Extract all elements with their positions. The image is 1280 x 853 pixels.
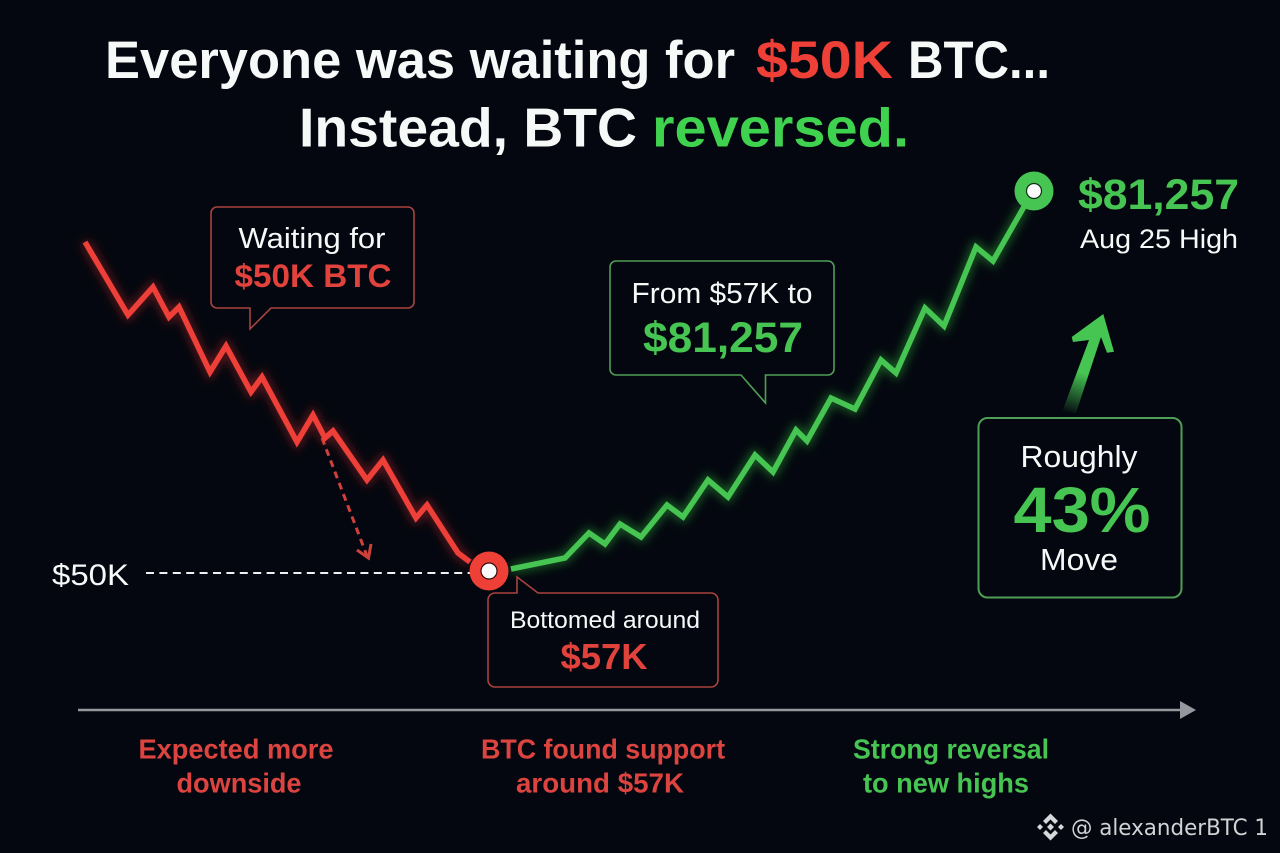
- title: reversed.: [652, 98, 909, 158]
- high price label: Aug 25 High: [1080, 224, 1238, 254]
- callout: roughly 43% move: 43%: [1014, 474, 1150, 546]
- title: Instead, BTC: [299, 98, 637, 158]
- timeline label: BTC found support: [481, 734, 725, 798]
- green rising price line: [511, 205, 1025, 569]
- red falling price line: [85, 242, 470, 562]
- $50K level label: $50K: [52, 559, 129, 592]
- timeline label: expected more downside: Expected more: [138, 734, 334, 764]
- dashed arrow: expected downside: [322, 438, 371, 558]
- high price label: $81,257: [1078, 171, 1239, 219]
- timeline label: BTC found support: BTC found support: [481, 734, 725, 764]
- title: [105, 31, 1050, 158]
- callout: waiting for $50K BTC: Waiting for: [238, 223, 386, 255]
- timeline axis arrow: [78, 701, 1196, 719]
- timeline label: strong reversal: to new highs: [863, 768, 1029, 798]
- title: Everyone was waiting for: [105, 31, 735, 90]
- callout: bottomed around $57K: $57K: [560, 636, 648, 677]
- timeline label: expected more downside: downside: [176, 768, 302, 798]
- timeline label: strong reversal: Strong reversal: [853, 734, 1049, 764]
- marker: high point: [1014, 172, 1054, 210]
- marker: bottom point: [470, 552, 508, 590]
- timeline label: strong reversal: [853, 734, 1049, 798]
- watermark: @ alexanderBTC 1: [1071, 816, 1268, 841]
- callout: bottomed around $57K: Bottomed around: [510, 607, 700, 634]
- callout: roughly 43% move: Move: [1040, 542, 1118, 577]
- arrow: upward move: [1062, 314, 1114, 413]
- callout: from $57K to $81,257: From $57K to: [632, 278, 812, 310]
- $50K dashed level line: [146, 572, 472, 574]
- callout: roughly 43% move: Roughly: [1020, 439, 1138, 474]
- callout: waiting for $50K BTC: [211, 207, 414, 329]
- timeline label: BTC found support: around $57K: [516, 768, 684, 798]
- callout: roughly 43% move: [978, 418, 1182, 598]
- timeline label: expected more downside: [138, 734, 334, 798]
- callout: from $57K to $81,257: $81,257: [643, 314, 803, 362]
- title: $50K: [756, 31, 893, 90]
- high price label: [1078, 171, 1239, 254]
- callout: bottomed around $57K: [488, 577, 718, 687]
- title: BTC...: [908, 31, 1050, 90]
- callout: from $57K to $81,257: [610, 261, 834, 403]
- callout: waiting for $50K BTC: $50K BTC: [234, 258, 392, 294]
